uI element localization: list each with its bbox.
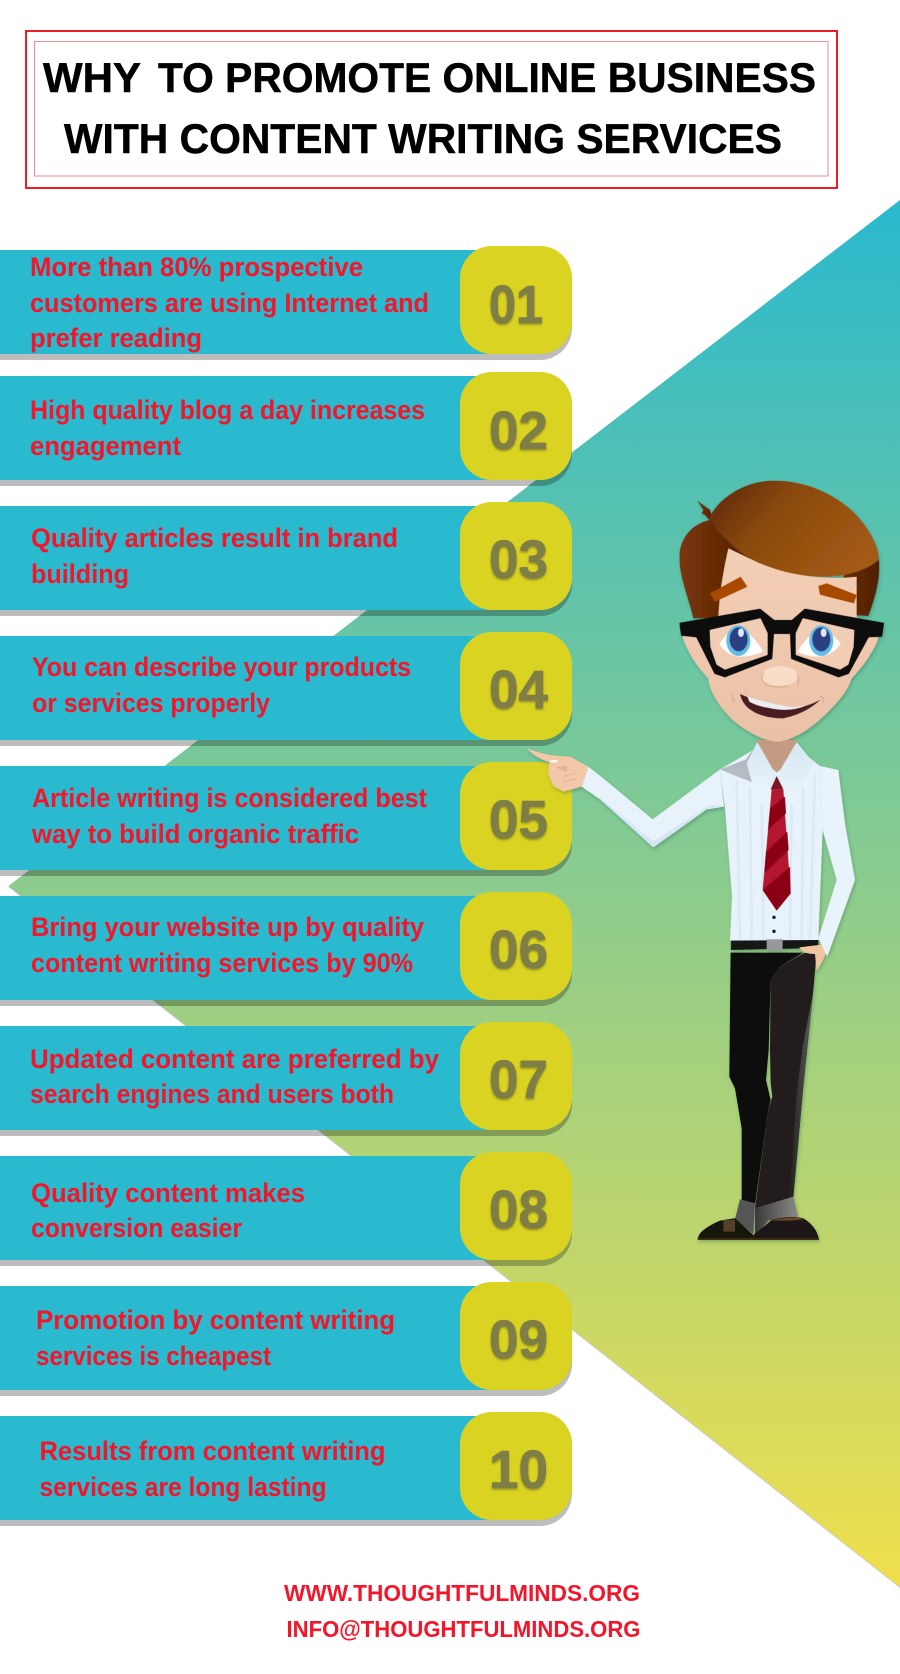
character: cartoon man pointing (527, 481, 883, 1240)
item 08: 08 (489, 1180, 548, 1240)
neck (756, 740, 797, 773)
item 02 (0, 372, 572, 486)
back hair (679, 501, 879, 618)
head (679, 481, 883, 742)
item 06: Bring your website up by quality (31, 912, 424, 942)
face (683, 548, 878, 742)
item 02: High quality blog a day increases (30, 395, 425, 425)
pointing arm (582, 767, 724, 847)
item 10: 10 (489, 1440, 548, 1500)
title line 2: WITH CONTENT WRITING SERVICES (64, 115, 782, 162)
item 07: 07 (489, 1050, 548, 1110)
item 08 (0, 1152, 572, 1266)
item 07: search engines and users both (30, 1079, 394, 1109)
item 04 (0, 632, 572, 746)
shoulder shading (720, 743, 763, 783)
item 10: services are long lasting (40, 1472, 326, 1502)
belt (731, 940, 818, 950)
shirt, arms, tie (527, 740, 855, 971)
left eye (719, 627, 763, 657)
hand in pocket (799, 944, 827, 971)
legs and shoes (698, 948, 819, 1240)
item 05: way to build organic traffic (31, 819, 359, 849)
eyebrows (710, 577, 747, 602)
item 02: 02 (489, 401, 548, 461)
mouth (740, 694, 821, 718)
item 04: 04 (489, 660, 548, 720)
tie (771, 776, 783, 789)
item 03: 03 (489, 530, 548, 590)
item 10: Results from content writing (40, 1436, 386, 1466)
item 09: 09 (489, 1310, 548, 1370)
item 06: 06 (489, 920, 548, 980)
item 09: services is cheapest (36, 1341, 271, 1371)
item 06: content writing services by 90% (31, 948, 413, 978)
item 01: prefer reading (30, 323, 202, 353)
item 06 (0, 892, 572, 1006)
item 03: Quality articles result in brand (31, 523, 398, 553)
item 02: engagement (30, 431, 181, 461)
item 01: customers are using Internet and (30, 288, 429, 318)
item 09 (0, 1282, 572, 1396)
item 05: Article writing is considered best (32, 783, 427, 813)
item 03: building (31, 559, 129, 589)
hand (527, 748, 588, 792)
title line 1: WHY (43, 54, 141, 101)
glasses (680, 609, 883, 677)
item 01 (0, 246, 572, 360)
item 05 (0, 762, 572, 876)
item 04: or services properly (32, 688, 270, 718)
item 01: 01 (489, 275, 543, 335)
right eye (797, 627, 841, 657)
sleeve right (818, 766, 855, 957)
title box (26, 31, 837, 188)
item 03 (0, 502, 572, 616)
item 09: Promotion by content writing (36, 1305, 395, 1335)
buttons (772, 916, 776, 919)
title line 1: TO PROMOTE ONLINE BUSINESS (158, 54, 816, 101)
footer email: INFO@THOUGHTFULMINDS.ORG (286, 1616, 640, 1642)
item 10 (0, 1412, 572, 1526)
item 05: 05 (489, 790, 548, 850)
top hair (709, 481, 879, 577)
item 01: More than 80% prospective (30, 252, 363, 282)
footer website: WWW.THOUGHTFULMINDS.ORG (284, 1580, 640, 1606)
nose (762, 666, 798, 686)
item 08: conversion easier (31, 1213, 242, 1243)
collar (747, 742, 777, 805)
item 08: Quality content makes (31, 1178, 305, 1208)
item 07 (0, 1022, 572, 1136)
item 07: Updated content are preferred by (30, 1044, 439, 1074)
item 04: You can describe your products (32, 652, 411, 682)
